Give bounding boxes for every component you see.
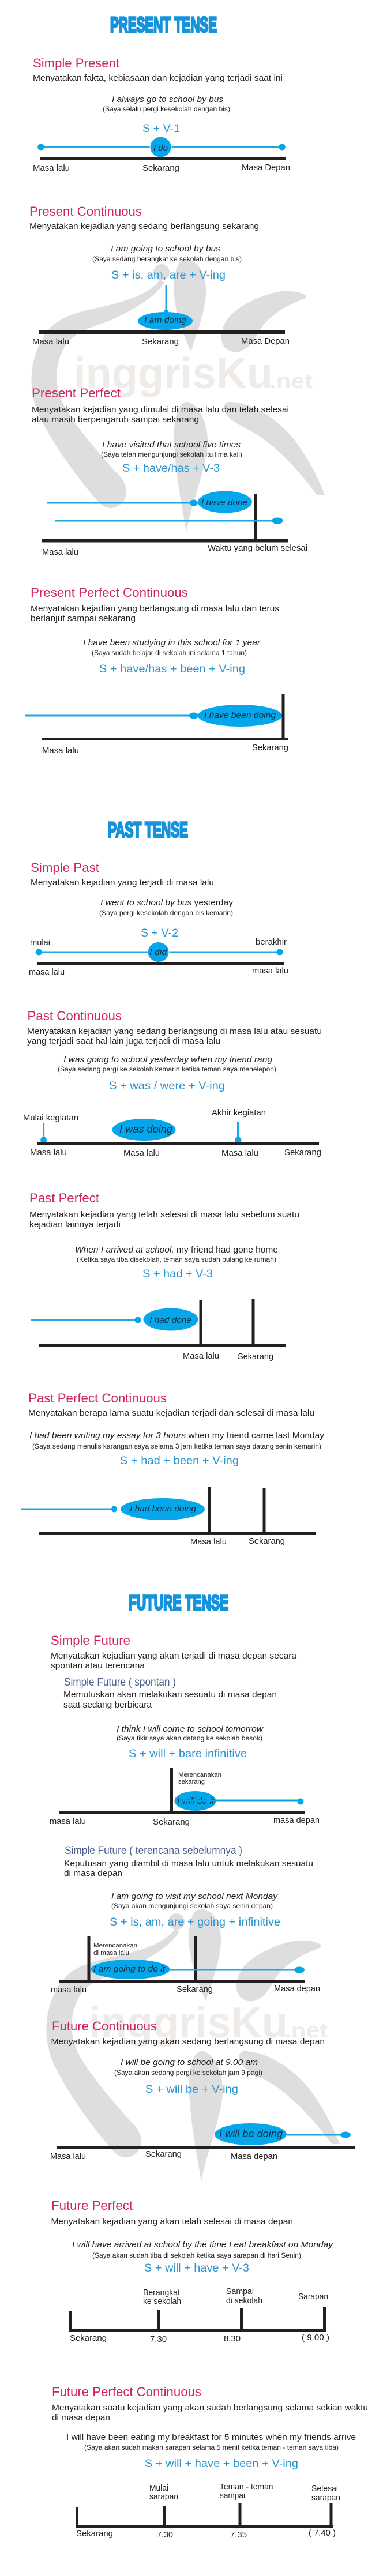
formula: S + V-1 [142, 122, 180, 135]
sub-description: spontan: saat sedang berbicara [63, 1700, 152, 1710]
timeline [25, 694, 288, 755]
timeline: I had done [149, 1316, 191, 1325]
timeline: masa lalu [252, 966, 288, 976]
heading: Present Perfect Continuous [31, 585, 188, 600]
timeline: Sekarang [252, 743, 288, 753]
heading: Simple Past [31, 860, 99, 875]
timeline: Sekarang [70, 2333, 107, 2343]
timeline: Sarapan [298, 2292, 328, 2302]
timeline: mulai [30, 938, 50, 947]
timeline: Masa lalu [30, 1148, 67, 1157]
translation: (Saya akan mengunjungi sekolah saya senin depan) [111, 1902, 273, 1910]
timeline: Mulai kegiatan [23, 1113, 78, 1123]
heading: Future Continuous [52, 2019, 157, 2033]
formula: S + had + V-3 [142, 1268, 213, 1280]
panel: Future Perfect [51, 2198, 333, 2344]
formula: S + will + bare infinitive [129, 1747, 247, 1760]
timeline: I am doing [144, 316, 186, 325]
timeline: I have done [201, 498, 247, 507]
timeline [51, 1936, 320, 1995]
translation: (Saya pergi kesekolah dengan bis kemarin) [99, 909, 233, 917]
translation: (Saya sudah belajar di sekolah ini selama 1 tahun) [92, 649, 247, 657]
timeline: Sekarang [177, 1984, 213, 1994]
panel: Simple Future [50, 1633, 320, 1995]
description: spontan atau terencana [51, 1661, 145, 1671]
timeline [50, 2123, 355, 2161]
translation: (Saya akan sedang pergi ke sekolah jam 9 pagi) [114, 2069, 262, 2077]
sub-description: terencana: di masa depan [64, 1868, 122, 1878]
translation: (Saya telah mengunjungi sekolah itu lima kali) [101, 450, 242, 458]
timeline: Masa lalu [123, 1148, 160, 1158]
timeline: Masa Depan [241, 336, 290, 346]
timeline [50, 1768, 320, 1827]
example: I think I will come to school tomorrow [117, 1725, 264, 1734]
timeline: Selesai [311, 2484, 338, 2494]
formula: S + will + have + been + V-ing [145, 2457, 298, 2470]
timeline: I did [149, 948, 167, 957]
formula: S + have/has + V-3 [122, 462, 220, 475]
description: Menyatakan kejadian yang sedang berlangsung di masa lalu atau sesuatu [27, 1026, 322, 1036]
timeline: Teman - teman [220, 2482, 273, 2492]
sub-heading: terencana: Simple Future ( terencana sebelumnya ) [65, 1845, 242, 1857]
example: I will be going to school at 9.00 am [121, 2058, 258, 2067]
heading: Simple Future [51, 1633, 130, 1648]
example: I am going to school by bus [111, 245, 220, 254]
description: Menyatakan kejadian yang akan sedang berlangsung di masa depan [51, 2037, 325, 2047]
timeline: Akhir kegiatan [212, 1108, 266, 1118]
translation: (Ketika saya tiba disekolah, teman saya sudah pulang ke rumah) [77, 1255, 276, 1263]
sub-description: terencana: Keputusan yang diambil di masa lalu untuk melakukan sesuatu [64, 1859, 313, 1868]
example: I will have been eating my breakfast for 5 minutes when my friends arrive [66, 2433, 356, 2442]
timeline: Masa lalu [190, 1537, 227, 1547]
timeline [42, 491, 307, 557]
title: Past Tense: PAST TENSE [108, 818, 188, 842]
timeline: masa lalu [50, 1817, 86, 1826]
timeline: Sekarang [284, 1148, 321, 1157]
sub-description: terencana [64, 1859, 313, 1878]
heading: Past Perfect Continuous [28, 1391, 167, 1405]
description: Menyatakan kejadian yang telah selesai di masa lalu sebelum suatu [29, 1210, 299, 1220]
panel: Simple Past [29, 860, 288, 977]
watermark: inggrisKu logo upper [31, 260, 325, 532]
timeline: Waktu yang belum selesai [208, 543, 307, 553]
description [29, 1210, 299, 1229]
timeline: masa depan [273, 1815, 320, 1825]
heading: Future Perfect [51, 2198, 133, 2213]
formula: S + is, am, are + going + infinitive [110, 1916, 280, 1928]
panel: Future Continuous [50, 2019, 355, 2161]
description: Menyatakan berapa lama suatu kejadian terjadi dan selesai di masa lalu [28, 1408, 314, 1418]
timeline: Sekarang [238, 1352, 273, 1362]
timeline: di masa lalu [93, 1950, 129, 1957]
timeline [21, 1487, 316, 1547]
timeline: 7.30 [150, 2334, 167, 2344]
watermark: inggrisKu logo lower: inggrisKu [89, 1998, 288, 2047]
panel: Present Perfect Continuous [25, 585, 288, 755]
timeline [32, 285, 290, 347]
translation: (Saya akan sudah makan sarapan selama 5 menit ketika teman - teman saya tiba) [84, 2443, 339, 2451]
panel: Simple Present [33, 56, 290, 173]
heading: Future Perfect Continuous [52, 2385, 201, 2399]
timeline: Merencanakan [93, 1942, 137, 1949]
timeline: sampai [220, 2491, 245, 2500]
timeline: Masa depan [274, 1984, 320, 1994]
formula: S + have/has + been + V-ing [99, 663, 245, 675]
timeline: sekarang [178, 1778, 205, 1785]
sub-description: spontan [63, 1690, 277, 1710]
description [32, 405, 289, 424]
example: When I arrived at school, my friend had gone home [75, 1246, 278, 1255]
timeline: Masa Depan [242, 163, 290, 172]
description: Menyatakan fakta, kebiasaan dan kejadian yang terjadi saat ini [33, 73, 283, 83]
panel: Present Continuous [29, 204, 290, 347]
description: Menyatakan kejadian yang berlangsung di masa lalu dan terus [31, 604, 279, 614]
timeline: I am going to do it [93, 1965, 166, 1974]
panel: Future Perfect Continuous [52, 2385, 368, 2540]
panel: Past Continuous [23, 1009, 322, 1158]
panel: Past Perfect Continuous [21, 1391, 325, 1547]
timeline [69, 2287, 329, 2344]
heading: Simple Present [33, 56, 119, 70]
example: I went to school by bus yesterday [100, 898, 234, 908]
timeline: sarapan [311, 2493, 340, 2503]
watermark: inggrisKu logo upper: .net [269, 369, 313, 393]
formula: S + will be + V-ing [145, 2083, 238, 2096]
example: I have been studying in this school for 1 year [83, 638, 261, 648]
formula: S + was / were + V-ing [109, 1080, 225, 1092]
timeline: sarapan [149, 2492, 178, 2502]
title: Future Tense: FUTURE TENSE [129, 1590, 228, 1615]
translation: (Saya sedang pergi ke sekolah kemarin ketika teman saya menelepon) [58, 1065, 276, 1073]
description: Menyatakan kejadian yang sedang berlangsung sekarang [29, 221, 259, 231]
description: Menyatakan suatu kejadian yang akan sudah berlangsung selama sekian waktu [52, 2403, 368, 2413]
timeline: 7.30 [157, 2530, 173, 2540]
timeline: Sekarang [153, 1817, 190, 1827]
watermark: inggrisKu logo upper: inggrisKu [74, 349, 273, 397]
timeline: Masa lalu [42, 547, 78, 557]
timeline: Berangkat [143, 2288, 181, 2297]
watermark: inggrisKu logo lower: .net [284, 2018, 328, 2042]
description: Menyatakan kejadian yang dimulai di masa lalu dan telah selesai [32, 405, 289, 415]
timeline: Sekarang [145, 2149, 182, 2159]
timeline: di sekolah [226, 2296, 262, 2306]
timeline [33, 137, 290, 173]
translation: (Saya sedang menulis karangan saya selama 3 jam ketika teman saya datang senin kemarin) [32, 1442, 321, 1450]
timeline: I have been doing [204, 711, 276, 720]
title: Present Tense: PRESENT TENSE [110, 13, 217, 37]
timeline: Masa depan [231, 2152, 277, 2161]
description: yang terjadi saat hal lain juga terjadi di masa lalu [27, 1036, 220, 1046]
timeline [31, 1299, 286, 1362]
timeline [29, 937, 288, 977]
timeline: Sekarang [142, 163, 179, 173]
description: berlanjut sampai sekarang [31, 614, 136, 623]
sub-description: spontan: Memutuskan akan melakukan sesuatu di masa depan [63, 1690, 277, 1699]
timeline [76, 2482, 340, 2540]
translation: (Saya sedang berangkat ke sekolah dengan bis) [92, 255, 242, 263]
timeline: 7.35 [230, 2530, 247, 2540]
example: I am going to visit my school next Monday [111, 1892, 278, 1901]
timeline: Masa lalu [50, 2152, 86, 2161]
formula: S + will + have + V-3 [144, 2262, 249, 2274]
description [51, 1651, 297, 1671]
formula: S + is, am, are + V-ing [111, 269, 226, 281]
translation: (Saya akan sudah tiba di sekolah ketika saya sarapan di hari Senin) [92, 2251, 301, 2259]
timeline: Sekarang [249, 1536, 285, 1546]
timeline: Mulai [149, 2483, 168, 2493]
timeline: Masa lalu [42, 746, 79, 755]
timeline: I do [153, 144, 168, 153]
timeline: Sekarang [76, 2529, 113, 2539]
description: Menyatakan kejadian yang akan telah selesai di masa depan [51, 2217, 293, 2227]
sub-heading: spontan: Simple Future ( spontan ) [64, 1676, 176, 1688]
formula: S + V-2 [141, 927, 178, 939]
timeline: ( 9.00 ) [302, 2333, 329, 2342]
timeline: I will do it [177, 1797, 215, 1806]
translation: (Saya selalu pergi kesekolah dengan bis) [103, 105, 230, 113]
description: Menyatakan kejadian yang akan terjadi di masa depan secara [51, 1651, 297, 1661]
description: atau masih berpengaruh sampai sekarang [32, 415, 199, 424]
description [31, 604, 279, 623]
timeline: 8.30 [224, 2334, 241, 2344]
timeline: ke sekolah [143, 2296, 181, 2306]
example: I was going to school yesterday when my friend rang [63, 1055, 272, 1065]
example: I have visited that school five times [102, 441, 241, 450]
heading: Present Perfect [32, 386, 121, 400]
heading: Past Perfect [29, 1191, 99, 1205]
timeline: I will be doing [219, 2128, 283, 2139]
description [52, 2403, 368, 2423]
timeline: Sekarang [142, 337, 179, 347]
timeline [23, 1108, 321, 1158]
timeline: Masa lalu [32, 337, 69, 347]
timeline: masa lalu [51, 1985, 87, 1995]
timeline: masa lalu [29, 967, 65, 977]
panel: Past Perfect [29, 1191, 299, 1362]
panel: Present Perfect [32, 386, 307, 557]
description [27, 1026, 322, 1046]
watermark: inggrisKu logo lower [46, 1909, 340, 2182]
heading: Present Continuous [29, 204, 142, 219]
example: I had been writing my essay for 3 hours when my friend came last Monday [29, 1431, 325, 1441]
timeline: Merencanakan [178, 1772, 221, 1778]
description: Menyatakan kejadian yang terjadi di masa lalu [31, 878, 214, 888]
heading: Past Continuous [28, 1009, 122, 1023]
timeline: Masa lalu [33, 163, 70, 173]
timeline: Masa lalu [183, 1351, 219, 1361]
description: di masa depan [52, 2413, 110, 2423]
formula: S + had + been + V-ing [120, 1454, 239, 1467]
example: I always go to school by bus [112, 95, 223, 104]
example: I will have arrived at school by the time I eat breakfast on Monday [72, 2240, 333, 2250]
timeline: Sampai [226, 2287, 254, 2296]
description: kejadian lainnya terjadi [29, 1220, 121, 1229]
timeline: ( 7.40 ) [309, 2528, 336, 2538]
translation: (Saya fikir saya akan datang ke sekolah besok) [117, 1734, 262, 1742]
timeline: I had been doing [130, 1505, 196, 1514]
timeline: berakhir [256, 937, 287, 947]
timeline: Masa lalu [221, 1148, 258, 1158]
timeline: I was doing [119, 1123, 172, 1135]
